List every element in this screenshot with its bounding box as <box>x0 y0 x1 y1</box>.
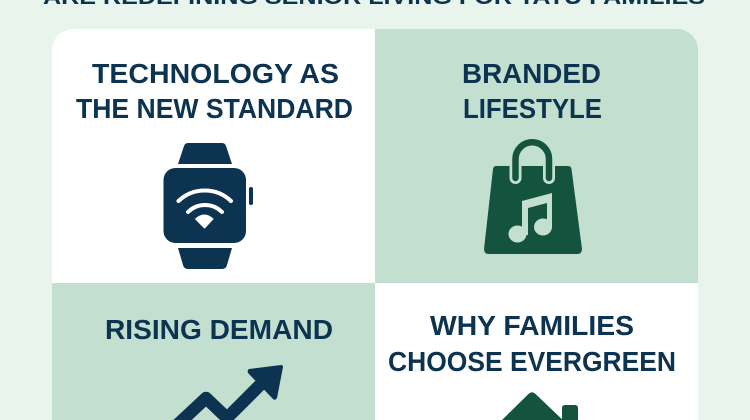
panel: why families choose evergreen <box>375 283 698 420</box>
heading: branded lifestyle <box>464 64 601 118</box>
heading: rising demand: RISING DEMAND <box>105 314 333 345</box>
heading: why families choose evergreen <box>389 316 674 372</box>
heading: branded lifestyle: LIFESTYLE <box>463 93 602 124</box>
icon: rising arrow <box>174 365 283 420</box>
panel: technology <box>52 29 375 283</box>
panel: rising demand <box>52 283 375 420</box>
heading: technology: TECHNOLOGY AS <box>92 58 339 89</box>
icon: house <box>498 392 578 420</box>
panel: branded lifestyle <box>375 29 698 283</box>
heading: technology: THE NEW STANDARD <box>76 93 353 124</box>
heading: why families choose evergreen: WHY FAMILIES <box>430 310 634 341</box>
icon: smartwatch <box>164 143 253 269</box>
icon: shopping bag with music note <box>484 142 582 254</box>
heading: technology <box>76 64 352 118</box>
heading: branded lifestyle: BRANDED <box>462 58 601 89</box>
heading: why families choose evergreen: CHOOSE EVERGREEN <box>388 346 676 377</box>
